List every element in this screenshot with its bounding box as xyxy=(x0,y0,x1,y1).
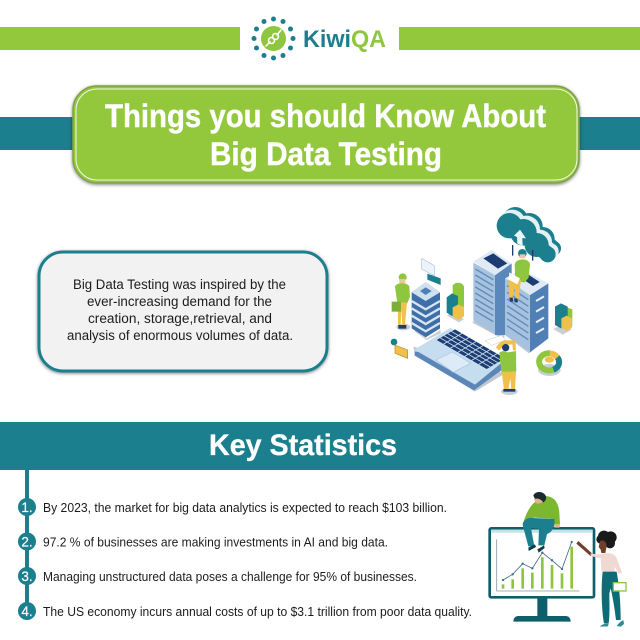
intro paragraph: ever-increasing demand for the xyxy=(87,294,272,309)
figure: man sitting on monitor xyxy=(523,492,560,553)
illustration: big data isometric servers and cloud xyxy=(391,207,572,395)
icon: pie chart xyxy=(538,353,561,376)
heading band: Key Statistics xyxy=(0,422,640,470)
title text xyxy=(105,98,546,172)
figure: woman pointing xyxy=(576,531,626,627)
icon: server rack left xyxy=(472,250,512,339)
stat 4: 4. xyxy=(21,604,33,619)
figure: person with folder xyxy=(392,273,410,330)
heading band: Key Statistics: Key Statistics xyxy=(209,429,397,462)
icon: mail and pin xyxy=(391,339,408,358)
logo: KiwiQA xyxy=(252,16,386,60)
teal band behind title xyxy=(0,117,640,150)
figure: person at laptop xyxy=(496,340,518,395)
icon: monitor xyxy=(490,528,594,622)
panel: intro text xyxy=(39,252,327,371)
title text: Things you should Know About xyxy=(105,98,546,134)
illustration: monitor with chart and people xyxy=(490,492,626,627)
icon: isometric blocks right xyxy=(553,303,572,335)
line and bar chart xyxy=(497,539,579,591)
icon: cloud xyxy=(497,207,561,262)
icon: laptop xyxy=(413,328,507,392)
stat 3: Managing unstructured data poses a challenge for 95% of businesses. xyxy=(43,569,417,584)
icon: server rack right xyxy=(505,269,548,353)
icon: logo dotted circle xyxy=(252,16,296,60)
figure: person sitting on server xyxy=(508,245,533,302)
logo wordmark: KiwiQA xyxy=(303,26,386,53)
stat 3: 3. xyxy=(21,569,33,584)
intro paragraph: analysis of enormous volumes of data. xyxy=(67,328,293,343)
icon: storage stack xyxy=(412,282,441,340)
intro paragraph: Big Data Testing was inspired by the xyxy=(73,277,286,292)
intro paragraph xyxy=(67,277,293,343)
stat 1: 1. xyxy=(21,500,33,515)
stat 2: 2. xyxy=(21,534,33,550)
stat 1: By 2023, the market for big data analytics is expected to reach $103 billion. xyxy=(43,500,447,515)
top green bars xyxy=(0,27,640,50)
statistics timeline xyxy=(18,470,472,620)
stat 2: 97.2 % of businesses are making investments in AI and big data. xyxy=(43,534,388,550)
icon: message cards xyxy=(422,258,441,285)
intro paragraph: creation, storage,retrieval, and xyxy=(88,311,272,326)
title text: Big Data Testing xyxy=(210,136,442,172)
stat 4: The US economy incurs annual costs of up to $3.1 trillion from poor data quality. xyxy=(43,604,472,619)
icon: isometric blocks left xyxy=(447,283,464,322)
title panel xyxy=(73,86,579,183)
